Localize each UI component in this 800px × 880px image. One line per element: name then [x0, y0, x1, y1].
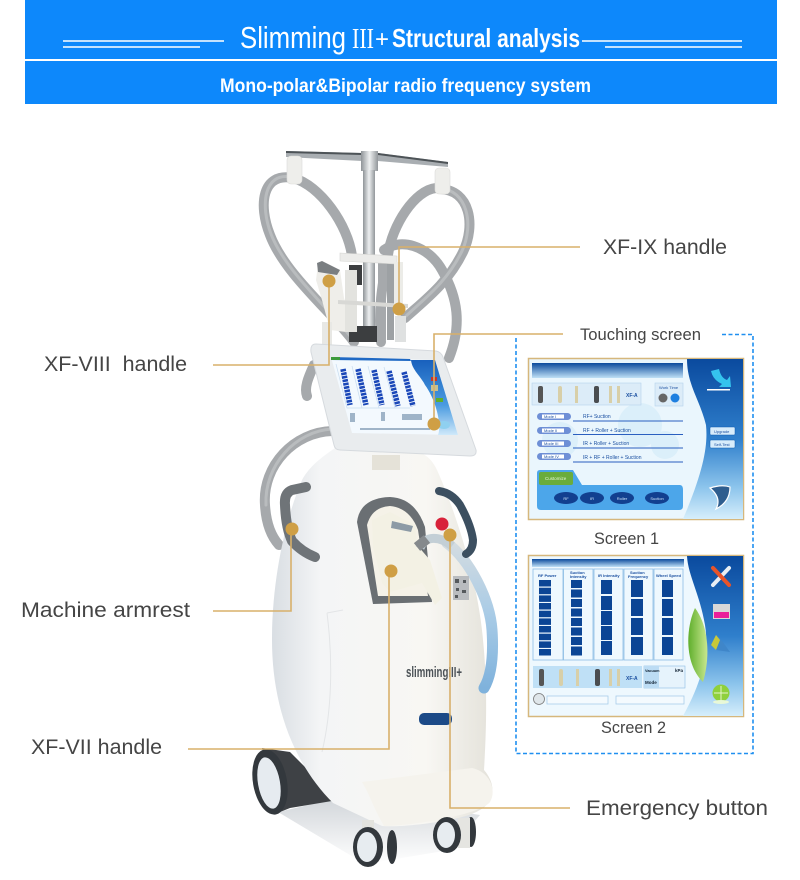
machine illustration [248, 151, 493, 867]
screen 1 customize panel: IR [590, 496, 594, 501]
label: screen 1: Screen 1 [594, 529, 659, 548]
panel: screen 2 [528, 556, 744, 716]
dashed screen frame [516, 334, 753, 754]
callout: XF-VIII handle: XF-VIII handle [44, 352, 187, 376]
callout: XF-VII handle [31, 564, 398, 759]
screen 2 side panel [683, 556, 743, 716]
touch screen monitor [311, 344, 476, 456]
brand mark: slimmingIII+ [406, 664, 462, 681]
suction intensity bars [571, 580, 582, 656]
screen 1 modes: IR + Roller + Suction [583, 441, 629, 447]
screen 1 handle strip: XF-A [626, 393, 638, 399]
callout: machine armrest [21, 522, 298, 622]
callout: XF-VII handle: XF-VII handle [31, 735, 162, 759]
screen 2 level columns [533, 569, 683, 660]
callout: touching screen: Touching screen [580, 325, 701, 344]
callout: machine armrest: Machine armrest [21, 598, 190, 622]
callout: XF-IX handle [392, 235, 727, 316]
screen 1 customize panel: Roller [617, 496, 628, 501]
screen 2 level columns: Wheel Speed [656, 573, 681, 578]
icon: return arrows [711, 635, 730, 652]
handle recess [357, 497, 432, 604]
screen 2 header bar [532, 559, 684, 567]
icon: dolphin [710, 486, 730, 509]
pole and cross bar [286, 151, 450, 342]
machine body [272, 448, 492, 826]
screen 1 modes: RF + Roller + Suction [583, 428, 631, 434]
screen 2 handle strip: XF-A [626, 676, 638, 682]
screen 1 customize panel: Customize [545, 476, 567, 481]
screen 1 modes: Mode I [544, 414, 556, 419]
armrest right [439, 491, 473, 554]
header: title band [25, 0, 777, 59]
screen 2 vacuum box: Mode [645, 680, 657, 685]
QR code [453, 576, 469, 600]
title: Structural analysis [392, 23, 580, 53]
screen 2 level columns: Intensity [570, 574, 587, 579]
screen 2 green leaf [688, 608, 707, 682]
screen 1 modes: Mode III [544, 441, 558, 446]
screen 1 customize panel [537, 470, 683, 510]
body base [362, 768, 493, 826]
label: screen 2: Screen 2 [601, 718, 666, 737]
XF-IX handle [394, 262, 403, 312]
screen 2 vacuum box: kPa [675, 668, 684, 673]
title: III [352, 23, 374, 55]
screen 1 customize panel: RF [563, 496, 569, 501]
header: subtitle band [25, 61, 777, 104]
hoses [264, 176, 469, 545]
screen 1 header bar [532, 363, 683, 378]
callout: XF-IX handle: XF-IX handle [603, 235, 727, 259]
subtitle: Mono-polar&Bipolar radio frequency system [220, 76, 591, 97]
body seam [322, 610, 343, 752]
screen 1 work time [655, 383, 683, 406]
screen 1 upgrade buttons: Upgrade [714, 429, 730, 434]
floor shadow [278, 800, 480, 864]
screen 1 work time: Work Time [659, 385, 679, 390]
screen 1 upgrade buttons: Self-Test [714, 442, 730, 447]
wheel speed bars [662, 580, 673, 655]
blue rear hose [447, 543, 493, 688]
icon: green globe [712, 684, 730, 704]
emergency stop button [436, 518, 448, 530]
recess inner panel [367, 506, 428, 596]
screen 1 side panel [683, 359, 743, 519]
handle display [391, 521, 413, 532]
header rules right [582, 40, 742, 48]
icon: tools [713, 568, 729, 585]
screen 1 modes: Mode IV [544, 454, 559, 459]
icon: home arrow [707, 369, 731, 390]
header rules left [63, 40, 224, 48]
callout: emergency button [444, 528, 768, 820]
body grip [419, 713, 452, 725]
front wheel right [433, 817, 476, 853]
rear wheel [248, 747, 338, 817]
screen 2 vacuum box [644, 666, 685, 688]
armrest left [285, 487, 315, 557]
XF-VIII handle [316, 264, 352, 332]
screen 2 clock and fields [534, 694, 684, 704]
screen 1 modes: RF+ Suction [583, 414, 611, 420]
monitor bars [343, 369, 413, 406]
neck mount [372, 455, 400, 470]
screen 2 level columns: Suction [570, 570, 585, 575]
screen 2 level columns: IR Intensity [598, 573, 620, 578]
screen 1 modes: Mode II [544, 428, 557, 433]
callout: XF-VIII handle [44, 274, 336, 376]
RF power bars [539, 580, 551, 656]
front wheel left [353, 820, 397, 867]
screen 2 level columns: RF Power [538, 573, 557, 578]
hose hooks [287, 156, 302, 184]
IR intensity bars [601, 580, 612, 655]
title: Slimming [240, 20, 346, 55]
screen 1 upgrade buttons [710, 427, 735, 448]
screen 1 bubbles [542, 403, 679, 459]
screen 1 modes [537, 413, 683, 462]
screen 1 handle strip [532, 383, 641, 405]
screen 2 handle strip [533, 666, 642, 688]
icon: save disk [713, 604, 730, 619]
callout: emergency button: Emergency button [586, 796, 768, 820]
title: + [375, 26, 389, 53]
recess handle [372, 512, 442, 605]
monitor handle row [350, 412, 430, 430]
panel: screen 1 [528, 358, 744, 520]
suction frequency bars [631, 580, 643, 655]
monitor column frames [336, 364, 410, 408]
screen 2 level columns: Suction [630, 570, 645, 575]
screen 2 vacuum box: Vacuum [645, 669, 660, 673]
screen 1 customize panel: Suction [650, 496, 664, 501]
screen 2 level columns: Frequency [628, 574, 649, 579]
screen 1 modes: IR + RF + Roller + Suction [583, 455, 642, 461]
callout: touching screen [428, 325, 701, 430]
handle holder [316, 253, 408, 346]
handle hose [417, 538, 452, 548]
monitor side icons [431, 377, 450, 429]
